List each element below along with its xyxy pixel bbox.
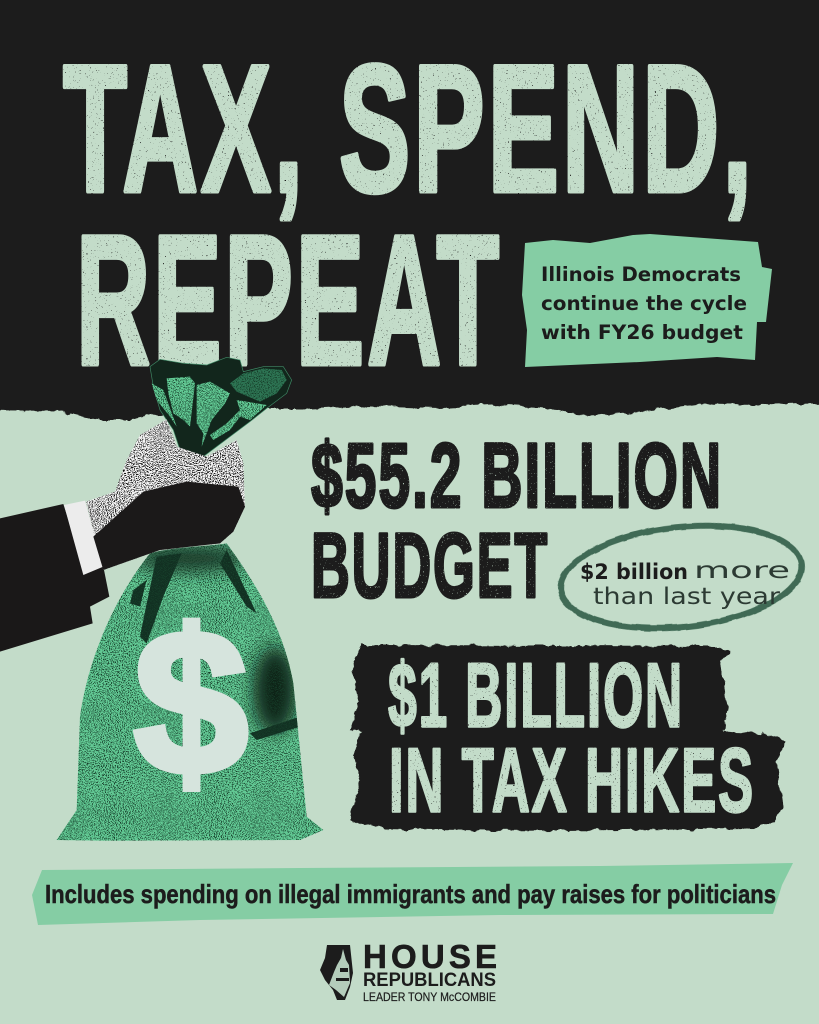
dollar sign: $: [134, 588, 248, 817]
headline: budget amount: [311, 425, 723, 617]
logo: REPUBLICANS: [363, 970, 496, 991]
icon: Illinois with capitol: [320, 945, 353, 1000]
title: TAX,: [63, 28, 306, 230]
hand: [86, 419, 245, 570]
title: [63, 28, 755, 404]
callout: 2 billion more: $2 billion: [580, 560, 688, 584]
shirt cuff: [64, 501, 103, 575]
callout: 2 billion more: more: [694, 558, 790, 584]
callout: 2 billion more: than last year: [593, 584, 781, 610]
subtitle tag: Illinois Democrats: [541, 263, 741, 286]
logo: HOUSE: [363, 938, 497, 975]
bag neck ruffle: [150, 357, 292, 457]
illustration: hand holding money bag: [0, 357, 323, 841]
suit sleeve: [0, 504, 109, 652]
headline: budget amount: BUDGET: [311, 515, 549, 617]
subtitle tag: continue the cycle: [541, 292, 747, 315]
tax hikes block: [350, 645, 785, 832]
logo: [320, 938, 497, 1004]
bottom note strip: [32, 863, 793, 925]
subtitle tag: with FY26 budget: [541, 321, 743, 344]
bag body: [57, 543, 323, 841]
subtitle tag: [522, 234, 772, 367]
black torn header band: [0, 0, 819, 420]
logo: LEADER TONY McCOMBIE: [363, 992, 496, 1004]
callout: 2 billion more: [555, 515, 807, 639]
